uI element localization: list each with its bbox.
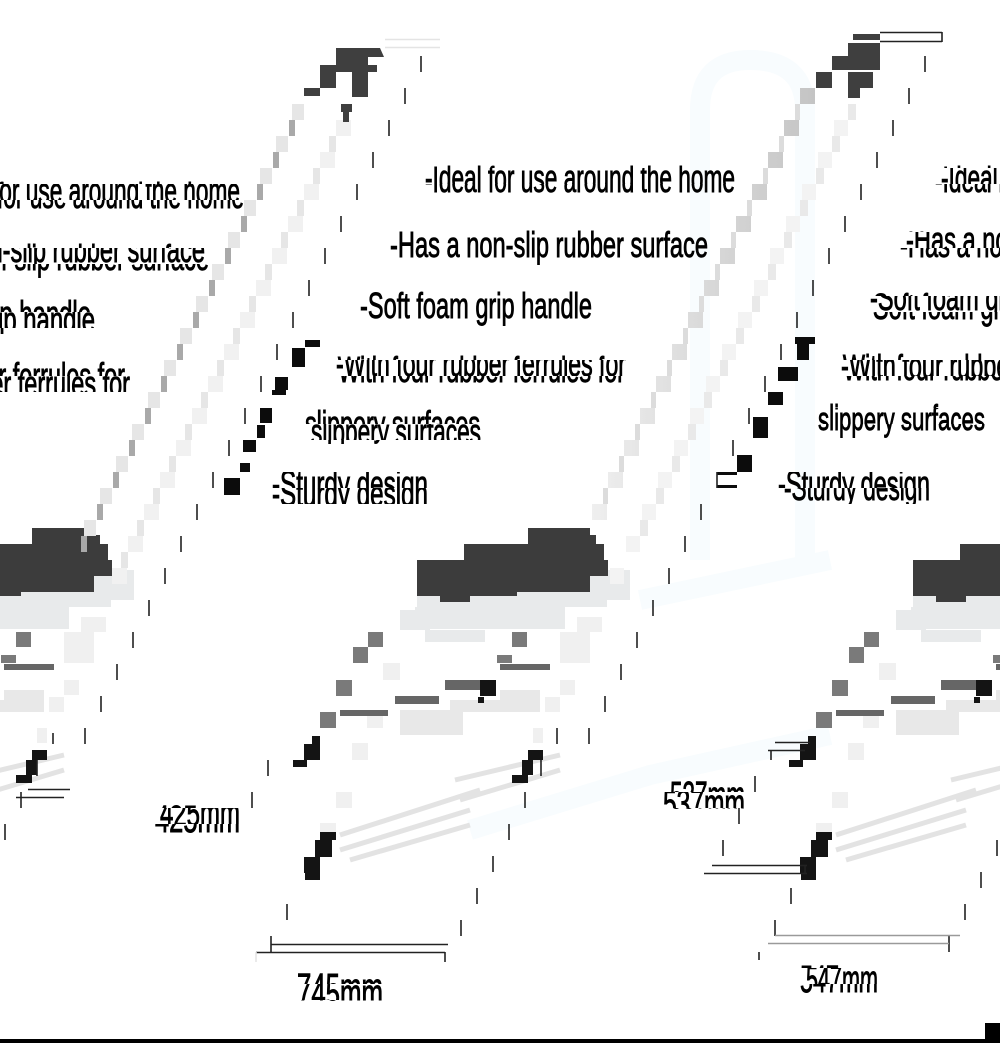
dimension label: bottom right — [800, 965, 877, 993]
feature list: middle copy: -Has a non-slip rubber surface — [390, 224, 708, 265]
pale ghost handle — [470, 60, 830, 830]
dimension label: bottom left — [298, 973, 382, 1001]
feature list: middle copy: -With four rubber ferrules for — [330, 349, 625, 390]
stool: left copy — [0, 528, 134, 880]
legs — [320, 632, 527, 728]
shadow strip — [340, 664, 550, 716]
feature list: middle copy: -Soft foam grip handle — [360, 285, 592, 326]
dimension label: left: 425mm — [160, 793, 240, 835]
dimension label: bottom right: 547mm — [806, 959, 878, 1001]
handle: left copy — [81, 104, 351, 584]
dimension label: left — [155, 805, 239, 833]
dimension label: left: 425mm — [155, 799, 240, 841]
stool: middle copy — [293, 528, 630, 880]
feature list: middle copy: slippery surfaces — [305, 403, 480, 444]
dimension label: bottom right: 547mm — [800, 959, 878, 1001]
handle grip: left copy — [304, 48, 384, 122]
handle grip: middle copy — [816, 34, 880, 98]
feature list: middle copy: -Soft foam grip handle — [360, 285, 592, 326]
feature list: middle copy: -With four rubber ferrules for — [336, 343, 626, 384]
height label fragments: right copy — [717, 337, 815, 488]
height label fragments: middle copy — [224, 340, 320, 495]
stool: right copy — [789, 528, 1000, 880]
handle: middle copy — [592, 88, 856, 584]
dimension label: middle: 537mm — [663, 783, 745, 825]
feature list: middle copy: -Ideal for use around the home — [425, 157, 735, 198]
feature list: middle copy: -Sturdy design — [272, 463, 428, 504]
feet — [293, 680, 543, 880]
dimension label: middle: 537mm — [670, 775, 745, 817]
bottom black edge — [0, 1023, 1000, 1043]
feature list: right copy — [778, 157, 1000, 508]
dimension label: bottom left: 745mm — [297, 967, 383, 1009]
seat — [417, 528, 608, 602]
feature list: middle copy: -Ideal for use around the home — [425, 159, 735, 200]
dimension label: bottom left: 745mm — [297, 973, 383, 1015]
feature list: middle copy: -Has a non-slip rubber surface — [390, 224, 708, 265]
feature list: middle copy: -Sturdy design — [272, 473, 428, 514]
dimension label: middle — [664, 781, 744, 809]
feature list: left copy — [0, 182, 243, 392]
feature list: middle copy: slippery surfaces — [311, 411, 481, 452]
feature list: middle copy — [272, 157, 735, 514]
